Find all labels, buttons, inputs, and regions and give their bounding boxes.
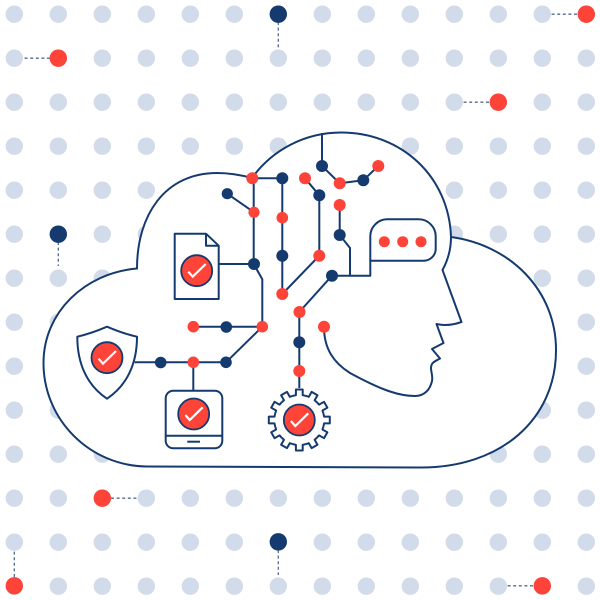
accent: red dot bottom right [506, 577, 551, 594]
circuit traces [135, 133, 378, 391]
icon: gear with check [269, 390, 330, 450]
accent: red dot upper left [23, 50, 67, 67]
accent: navy dot bottom [270, 533, 287, 575]
accent: red dot bottom left [6, 551, 23, 594]
icon: shield with check [77, 327, 137, 399]
icon: document with check [175, 234, 219, 299]
icon: tablet with check [166, 391, 222, 448]
circuit nodes [155, 160, 384, 377]
accent: navy dot top [270, 6, 287, 48]
icon: speech bubble [370, 219, 436, 261]
accent: red dot upper right [463, 94, 507, 111]
accent: navy dot left [50, 226, 67, 266]
cloud outline [44, 132, 556, 468]
accent: red dot lower left [94, 490, 138, 507]
head profile [324, 237, 462, 396]
accent: red dot top right [551, 6, 595, 23]
